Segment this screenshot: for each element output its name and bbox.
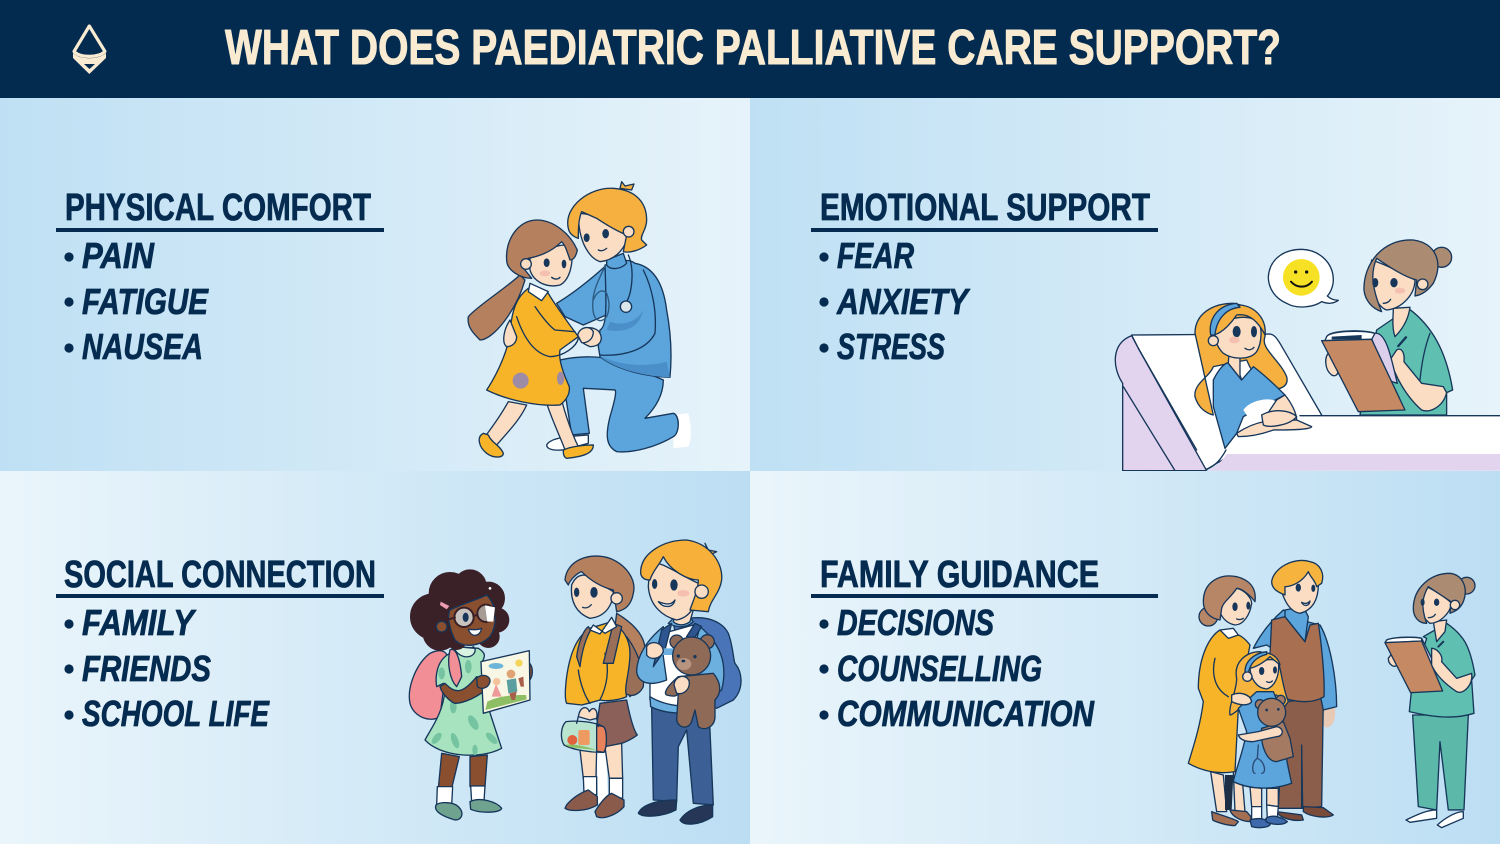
mother: [1188, 576, 1255, 826]
list: emotional support items: FEAR: [837, 235, 914, 276]
list: social connection items: [64, 602, 270, 734]
heading: physical comfort: PHYSICAL COMFORT: [65, 187, 371, 229]
panel: physical comfort: [0, 98, 750, 471]
speech bubble with smiley: [1268, 249, 1338, 307]
illustration: nurse kneeling with girl: [468, 182, 691, 458]
boy with teddy bear: [637, 540, 741, 824]
panel: family guidance: [750, 471, 1500, 844]
list: social connection items: FAMILY: [82, 602, 197, 643]
bed: [1115, 334, 1500, 471]
list: family guidance items: COMMUNICATION: [837, 693, 1095, 734]
icon: logo: [73, 26, 106, 74]
heading: social connection: SOCIAL CONNECTION: [64, 554, 376, 596]
list: physical comfort items: PAIN: [82, 235, 155, 276]
list: social connection items: FRIENDS: [82, 648, 211, 689]
patient girl: [1195, 303, 1312, 448]
illustration: three school children: [409, 540, 741, 824]
child with teddy: [1230, 652, 1293, 828]
father: [1253, 560, 1337, 820]
list: family guidance items: COUNSELLING: [837, 648, 1042, 689]
list: physical comfort items: FATIGUE: [82, 281, 209, 322]
girl with lunchbox: [561, 556, 645, 818]
header bar: [0, 0, 1500, 98]
list: emotional support items: ANXIETY: [836, 281, 971, 322]
panel: emotional support: [750, 98, 1500, 471]
nurse with clipboard: [1385, 573, 1475, 828]
list: physical comfort items: NAUSEA: [82, 326, 203, 367]
list: emotional support items: STRESS: [837, 326, 945, 367]
girl with drawing: [409, 570, 532, 820]
heading: emotional support: EMOTIONAL SUPPORT: [820, 187, 1150, 229]
list: physical comfort items: [64, 235, 209, 367]
heading: family guidance: FAMILY GUIDANCE: [820, 554, 1099, 596]
list: emotional support items: [819, 235, 971, 367]
panel: social connection: [0, 471, 750, 844]
illustration: child in hospital bed with nurse: [1115, 240, 1500, 471]
list: social connection items: SCHOOL LIFE: [82, 693, 270, 734]
list: family guidance items: DECISIONS: [837, 602, 994, 643]
nurse: [1322, 240, 1453, 415]
illustration: family with nurse: [1188, 560, 1475, 828]
list: family guidance items: [819, 602, 1095, 734]
